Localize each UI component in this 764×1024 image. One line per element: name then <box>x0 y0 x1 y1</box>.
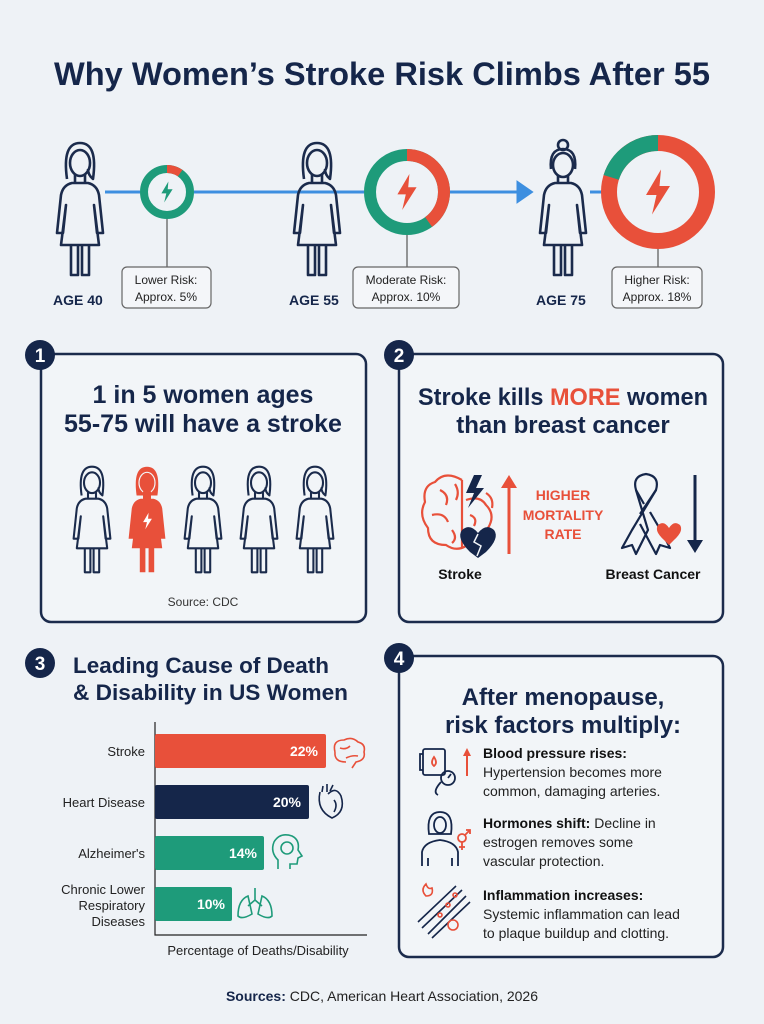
callout: lower risk: Lower Risk: <box>135 273 197 287</box>
badge 4 <box>384 643 414 673</box>
item: inflammation: to plaque buildup and clotting. <box>483 925 669 941</box>
axis label: Percentage of Deaths/Disability <box>167 943 349 958</box>
callout: lower risk: Approx. 5% <box>135 290 197 304</box>
item: blood pressure <box>420 745 662 799</box>
item: inflammation <box>418 884 680 941</box>
woman age 40 <box>57 143 103 275</box>
badge 1 <box>25 340 55 370</box>
labels <box>438 566 701 582</box>
bolt in brain <box>466 475 484 508</box>
heading 4: risk factors multiply: <box>445 712 681 739</box>
item: hormones: estrogen removes some <box>483 834 633 850</box>
panel 4 <box>384 643 723 957</box>
arrow down <box>687 475 703 553</box>
bar: respiratory <box>61 882 272 929</box>
item: inflammation: Systemic inflammation can lead <box>483 906 680 922</box>
heading 4: After menopause, <box>462 684 664 711</box>
woman age 75 <box>540 140 586 275</box>
age labels <box>53 292 586 308</box>
callout: moderate risk: Approx. 10% <box>372 290 441 304</box>
labels: Breast Cancer <box>606 566 701 582</box>
title: Why Women’s Stroke Risk Climbs After 55 <box>54 56 710 92</box>
bar: respiratory: 10% <box>197 896 226 912</box>
badge 4: 4 <box>394 649 405 670</box>
donut: 18% <box>609 143 707 241</box>
bar: alzheimer: 14% <box>229 845 258 861</box>
donut: 5% <box>144 169 190 215</box>
heading 2: than breast cancer <box>456 412 670 439</box>
timeline <box>53 140 707 308</box>
bar: alzheimer: Alzheimer's <box>78 846 145 861</box>
age labels: AGE 55 <box>289 292 339 308</box>
bar: respiratory: Diseases <box>92 914 145 929</box>
item: blood pressure: common, damaging arteries. <box>483 783 660 799</box>
item: hormones: vascular protection. <box>483 853 604 869</box>
icon: brain small <box>334 738 364 768</box>
connectors <box>167 219 658 267</box>
item: blood pressure: Hypertension becomes more <box>483 764 662 780</box>
callout: higher risk: Approx. 18% <box>623 290 692 304</box>
bar: heart: 20% <box>273 794 302 810</box>
badge 1: 1 <box>35 346 46 367</box>
labels: Stroke <box>438 566 482 582</box>
higher mortality text: HIGHER <box>536 487 590 503</box>
panel 1 <box>25 340 366 622</box>
donut: 10% <box>370 155 444 229</box>
icon: bp monitor <box>420 748 471 795</box>
icon: head <box>273 835 302 869</box>
item: blood pressure: Blood pressure rises: <box>483 745 627 761</box>
icon: ribbon <box>622 474 681 554</box>
callout: moderate risk: Moderate Risk: <box>366 273 446 287</box>
badge 3: 3 <box>35 654 45 675</box>
source note: Source: CDC <box>168 595 239 609</box>
higher mortality text: RATE <box>544 526 582 542</box>
bar: stroke: Stroke <box>107 744 145 759</box>
bar: heart <box>63 784 342 819</box>
bar: stroke: 22% <box>290 743 319 759</box>
icon: brain <box>422 475 496 558</box>
icon: lungs <box>238 888 272 918</box>
footer sources: Sources: CDC, American Heart Association, 2026 <box>226 988 538 1004</box>
bar: stroke <box>107 734 364 768</box>
icon: artery <box>418 884 470 938</box>
arrow up <box>501 475 517 554</box>
icon: woman bust <box>422 812 470 866</box>
age labels: AGE 75 <box>536 292 586 308</box>
callout: higher risk <box>612 267 702 308</box>
callout: moderate risk <box>353 267 459 308</box>
bar: respiratory: Respiratory <box>79 898 145 913</box>
bar: heart: Heart Disease <box>63 795 145 810</box>
callout: lower risk <box>122 267 211 308</box>
heading 2: Stroke kills MORE women <box>418 384 710 411</box>
badge 3 <box>25 648 55 678</box>
heading 3: & Disability in US Women <box>73 680 348 705</box>
heading 1: 1 in 5 women ages <box>93 381 313 409</box>
pictogram women <box>74 467 333 572</box>
broken heart <box>460 527 496 558</box>
item: hormones: Hormones shift: Decline in <box>483 815 656 831</box>
item: inflammation: Inflammation increases: <box>483 887 643 903</box>
panel 3: bar chart <box>25 648 367 958</box>
woman age 55 <box>294 143 340 275</box>
icon: heart <box>319 784 342 818</box>
bar: respiratory: Chronic Lower <box>61 882 146 897</box>
age labels: AGE 40 <box>53 292 103 308</box>
timeline arrow line <box>105 183 604 201</box>
callout: higher risk: Higher Risk: <box>624 273 690 287</box>
axes <box>155 722 367 935</box>
panel 2 <box>384 340 723 622</box>
heading 1: 55-75 will have a stroke <box>64 410 342 438</box>
item: hormones <box>422 812 656 869</box>
badge 2: 2 <box>394 346 404 367</box>
heading 3: Leading Cause of Death <box>73 653 329 678</box>
badge 2 <box>384 340 414 370</box>
bar: alzheimer <box>78 835 302 870</box>
higher mortality text: MORTALITY <box>523 507 604 523</box>
